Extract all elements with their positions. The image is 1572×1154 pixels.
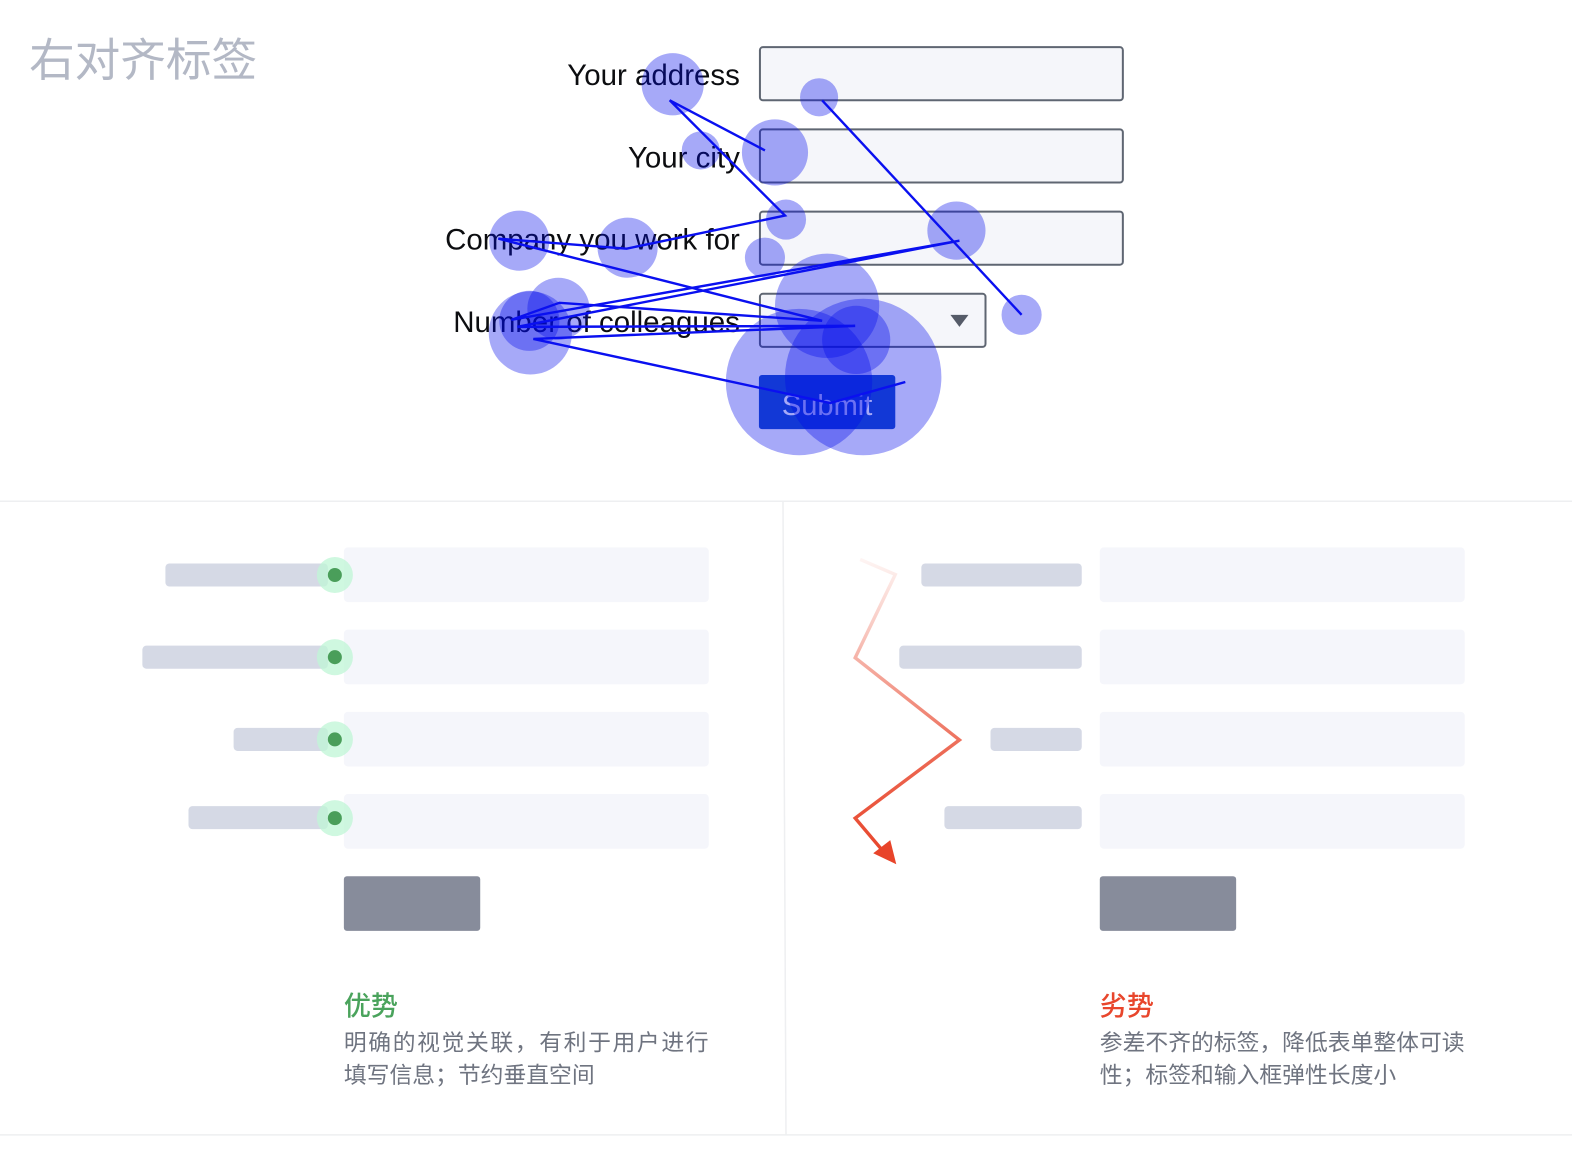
divider: top horizontal [0,500,1572,502]
heading: disadvantages: 劣势 [1100,992,1154,1022]
gaze fixation circles [489,53,1042,455]
label placeholder bars [142,563,328,829]
arrow: zigzag eye path [855,559,959,864]
input: address [760,47,1123,100]
alignment markers [317,557,353,836]
text: disadvantages description: 性；标签和输入框弹性长度小 [1100,1062,1396,1088]
divider: vertical [783,501,786,1135]
button placeholder [1100,876,1236,931]
label: company: Company you work for [445,224,740,257]
gaze path [498,100,1022,403]
text: advantages description: 明确的视觉关联，有利于用户进行 [344,1030,710,1056]
label: your address: Your address [567,59,740,92]
text: advantages description: 填写信息；节约垂直空间 [344,1062,595,1088]
panel: advantages [142,547,710,1088]
label: your city: Your city [628,141,740,174]
select: colleagues [760,294,986,347]
input placeholders [1100,547,1465,849]
input: city [760,129,1123,182]
icon: dropdown arrow [950,315,968,327]
submit button: Submit [782,390,872,422]
divider: bottom horizontal [0,1134,1572,1136]
text: disadvantages description: 参差不齐的标签，降低表单整体可读 [1100,1030,1465,1056]
panel: eye-tracking form [445,47,1123,455]
label: number of colleagues: Number of colleagues [453,306,740,339]
submit button [759,375,895,429]
button placeholder [344,876,480,931]
heading: advantages: 优势 [344,992,398,1022]
title: 右对齐标签 [29,35,257,86]
panel: disadvantages [855,547,1465,1088]
label placeholder bars [899,563,1082,829]
input: company [760,212,1123,265]
input placeholders [344,547,709,849]
